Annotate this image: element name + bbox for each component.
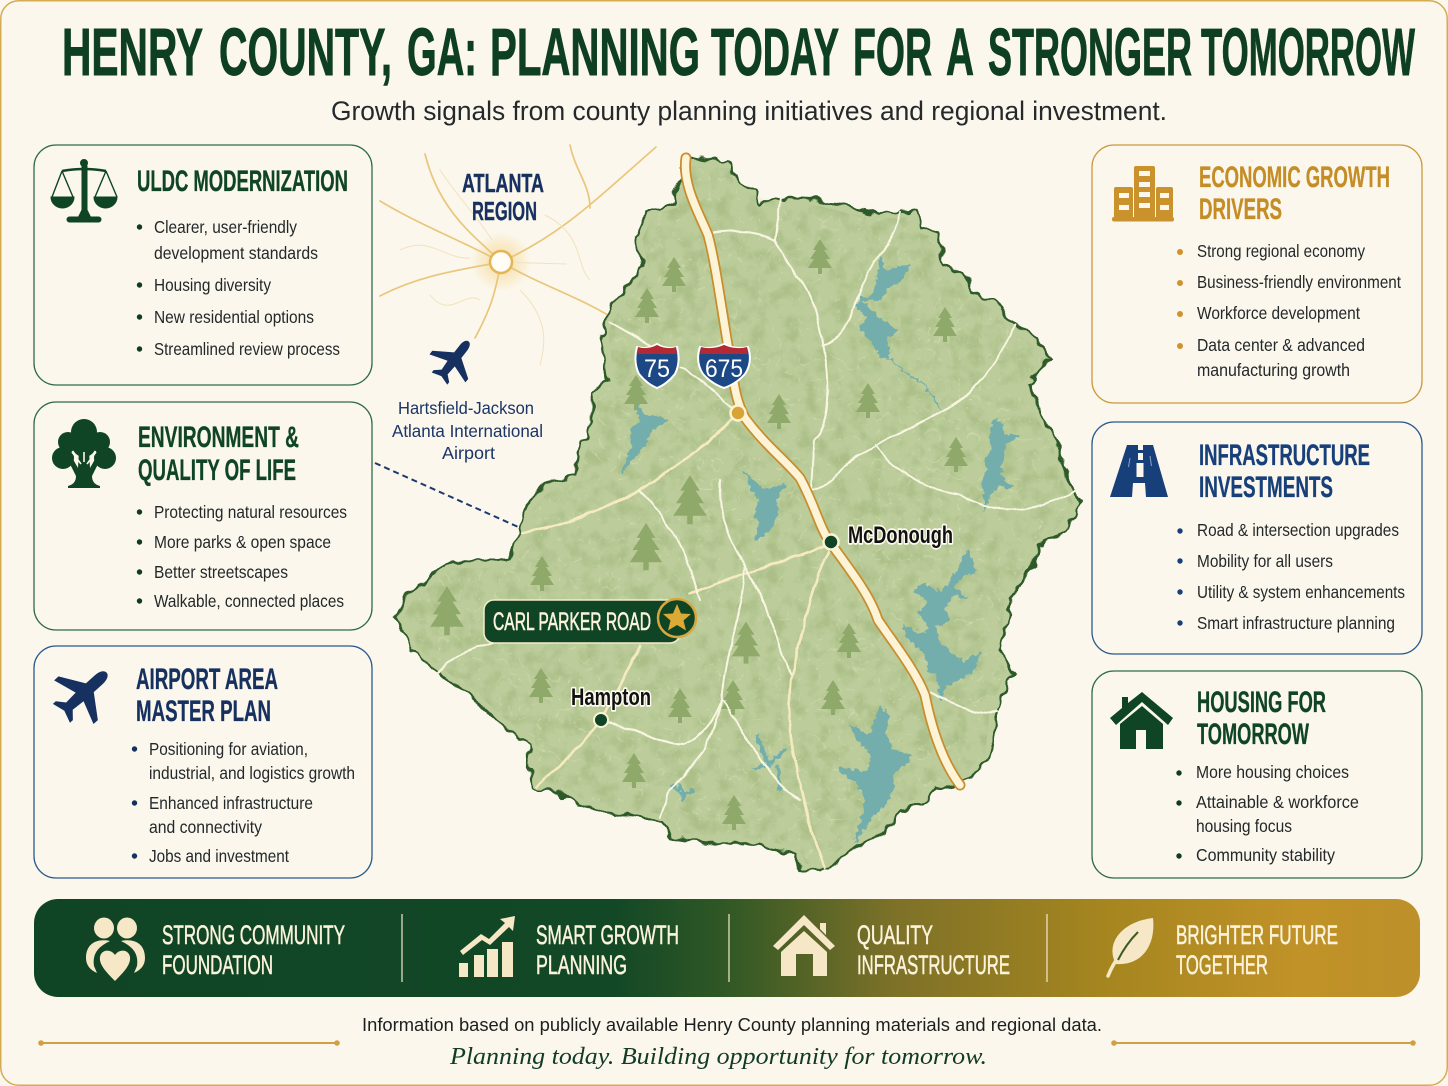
bullet list: Streamlined review process	[154, 339, 340, 359]
shield: I-675	[698, 344, 750, 388]
icon: tree	[52, 419, 116, 488]
heading: DRIVERS	[1199, 193, 1282, 226]
footer ornament right	[1111, 1040, 1416, 1046]
text: Quality Infrastructure: QUALITY	[857, 920, 933, 950]
bullet list: Smart infrastructure planning	[1197, 613, 1395, 633]
shield: I-675: 675	[705, 355, 743, 383]
text: Smart Growth Planning: PLANNING	[536, 950, 627, 980]
title: GA:	[407, 15, 477, 90]
bullet list: development standards	[154, 243, 318, 263]
bullet list: Walkable, connected places	[154, 591, 344, 611]
heading	[138, 421, 299, 487]
local roads	[437, 197, 1075, 868]
bullet list: industrial, and logistics growth	[149, 763, 355, 783]
bullet list: Housing diversity	[154, 275, 271, 295]
bullet list: Mobility for all users	[1197, 551, 1333, 571]
bullet list: Better streetscapes	[154, 562, 288, 582]
text: Quality Infrastructure	[857, 920, 1010, 980]
marker: interchange	[730, 406, 746, 420]
bullet list: Workforce development	[1197, 303, 1360, 323]
bullet list: Business-friendly environment	[1197, 272, 1401, 292]
bullet list	[137, 217, 340, 359]
highway I-75 / I-675	[685, 158, 960, 785]
heading: AIRPORT AREA	[136, 663, 278, 696]
lakes	[622, 256, 1018, 843]
heading	[136, 663, 278, 728]
panel: Environment and Quality of Life	[34, 402, 372, 630]
bullet list: More housing choices	[1196, 762, 1349, 782]
footer source note: Information based on publicly available Henry County planning materials and regional data.	[362, 1015, 1102, 1035]
heading: ULDC MODERNIZATION	[137, 165, 348, 198]
bullet list: Jobs and investment	[149, 846, 289, 866]
heading: HOUSING FOR	[1197, 686, 1326, 719]
heading	[1199, 161, 1390, 226]
county shape	[396, 156, 1080, 871]
bullet list: Positioning for aviation,	[149, 739, 308, 759]
icon: scales	[51, 160, 117, 222]
terrain texture	[390, 150, 1090, 880]
panel: Housing for Tomorrow	[1092, 671, 1422, 878]
panel: Infrastructure Investments	[1092, 422, 1422, 654]
bullet list: and connectivity	[149, 817, 262, 837]
panel: Economic Growth Drivers	[1092, 145, 1422, 403]
panel: Airport Area Master Plan	[34, 646, 372, 878]
text: Brighter Future Together: BRIGHTER FUTURE	[1176, 920, 1338, 950]
bullet list	[1177, 241, 1401, 380]
title: TODAY	[711, 15, 839, 90]
heading	[1197, 686, 1326, 751]
panel: ULDC Modernization	[34, 145, 372, 385]
text: Strong Community Foundation: STRONG COMMUNITY	[162, 920, 345, 950]
heading: ENVIRONMENT &	[138, 421, 299, 454]
label: Atlanta Region	[462, 168, 544, 226]
banner: bottom pillars	[34, 899, 1420, 997]
forest trees	[430, 239, 968, 830]
icon: house	[773, 915, 835, 976]
label: Atlanta Region: REGION	[472, 196, 537, 226]
icon: community	[86, 918, 145, 981]
icon: plane	[42, 651, 126, 735]
bullet list: Clearer, user-friendly	[154, 217, 297, 237]
icon: leaf	[1108, 918, 1153, 976]
bullet list: manufacturing growth	[1197, 360, 1350, 380]
marker: Hampton: Hampton	[571, 684, 651, 711]
bullet list: More parks & open space	[154, 532, 331, 552]
shield: I-75: 75	[644, 355, 670, 383]
shield: I-75	[635, 344, 679, 388]
heading: TOMORROW	[1197, 718, 1309, 751]
title: FOR	[853, 15, 932, 90]
map: Henry County	[390, 150, 1090, 880]
marker: McDonough: McDonough	[848, 522, 953, 549]
bullet list: Utility & system enhancements	[1197, 582, 1405, 602]
bullet list	[132, 739, 355, 866]
heading	[1199, 439, 1370, 504]
bullet list: Protecting natural resources	[154, 502, 347, 522]
bullet list: Strong regional economy	[1197, 241, 1365, 261]
callout: Carl Parker Road: CARL PARKER ROAD	[493, 608, 651, 636]
bullet list	[1176, 762, 1359, 865]
subtitle: Growth signals from county planning initiatives and regional investment.	[331, 96, 1167, 126]
text: Smart Growth Planning: SMART GROWTH	[536, 920, 679, 950]
bullet list	[1177, 520, 1405, 633]
text: Quality Infrastructure: INFRASTRUCTURE	[857, 950, 1010, 980]
icon: growth chart	[459, 916, 515, 977]
text: Strong Community Foundation	[162, 920, 345, 980]
icon: house	[1110, 692, 1173, 749]
title	[62, 15, 1415, 90]
icon: road	[1110, 445, 1168, 497]
bullet list: Enhanced infrastructure	[149, 793, 313, 813]
title: PLANNING	[490, 15, 700, 90]
bullet list: New residential options	[154, 307, 314, 327]
map: Atlanta region connector network	[380, 145, 656, 365]
heading: MASTER PLAN	[136, 695, 271, 728]
arrow: airport dashed connector	[375, 463, 525, 530]
bullet list: Data center & advanced	[1197, 335, 1365, 355]
bullet list: housing focus	[1196, 816, 1292, 836]
marker: Hampton	[571, 684, 651, 727]
label: Hartsfield-Jackson airport	[392, 398, 543, 463]
text: Brighter Future Together	[1176, 920, 1338, 980]
text: Strong Community Foundation: FOUNDATION	[162, 950, 273, 980]
bullet list: Community stability	[1196, 845, 1335, 865]
heading: INVESTMENTS	[1199, 471, 1333, 504]
label: Hartsfield-Jackson airport: Airport	[442, 443, 495, 463]
label: Atlanta Region: ATLANTA	[462, 168, 544, 198]
label: Hartsfield-Jackson airport: Atlanta International	[392, 421, 543, 441]
title: HENRY	[62, 15, 203, 90]
footer tagline: Planning today. Building opportunity for tomorrow.	[449, 1044, 987, 1070]
title: A	[946, 15, 974, 90]
title: COUNTY,	[219, 15, 392, 90]
callout: Carl Parker Road	[484, 599, 696, 643]
title: STRONGER	[988, 15, 1192, 90]
text: Brighter Future Together: TOGETHER	[1176, 950, 1268, 980]
marker: McDonough	[824, 522, 953, 550]
text: Smart Growth Planning	[536, 920, 679, 980]
footer ornament left	[38, 1040, 340, 1046]
bullet list: Road & intersection upgrades	[1197, 520, 1399, 540]
label: Hartsfield-Jackson airport: Hartsfield-Jackson	[398, 398, 534, 418]
icon: buildings	[1112, 166, 1174, 222]
bullet list	[137, 502, 347, 611]
bullet list: Attainable & workforce	[1196, 792, 1359, 812]
heading: QUALITY OF LIFE	[138, 454, 296, 487]
icon: airport plane	[422, 327, 486, 393]
